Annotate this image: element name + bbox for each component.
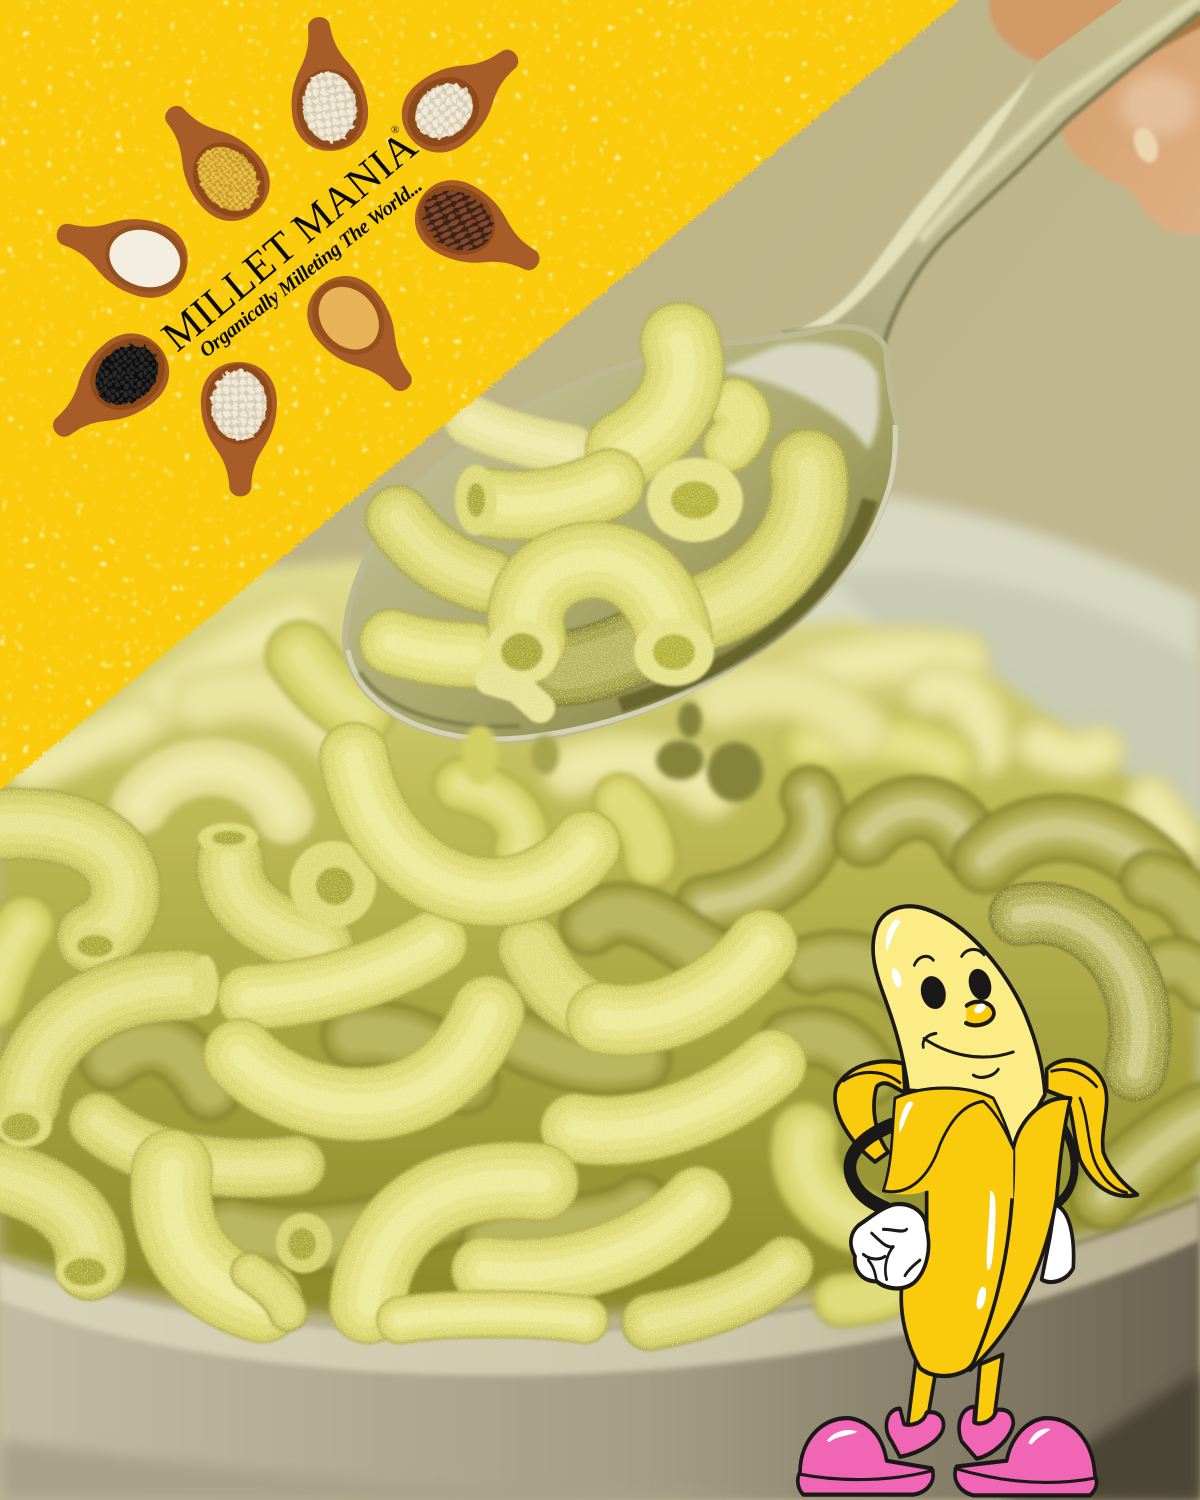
registered mark: ® (391, 124, 399, 136)
tagline: Organically Milleting The World... (196, 175, 427, 362)
banana body (901, 1144, 1014, 1376)
spoon bowl (345, 327, 897, 741)
left glove (851, 1204, 929, 1288)
scoop: pearl millet upper right (387, 24, 539, 168)
eyebrows (914, 949, 984, 965)
mid-distance macaroni (0, 655, 1200, 1300)
right back peel (1047, 1060, 1137, 1196)
right arm (1057, 1121, 1075, 1204)
scoop: white powder left (46, 195, 197, 307)
hand holding the spoon (989, 0, 1200, 235)
finger pad (1120, 73, 1196, 137)
left front peel (883, 1088, 1013, 1198)
right glove (1042, 1204, 1074, 1282)
pasta on the spoon (392, 342, 810, 708)
body highlights (987, 1191, 996, 1270)
right sock (959, 1407, 1013, 1459)
upper finger (989, 0, 1135, 62)
foreground macaroni (0, 823, 1140, 1322)
macaroni tube openings (0, 823, 258, 1293)
banana mascot (798, 906, 1137, 1495)
scoop: yellow millet upper left (140, 84, 285, 236)
spoon (345, 0, 1200, 741)
right front peel (970, 1098, 1071, 1370)
shadowed palm behind handle (1110, 0, 1200, 75)
spoon handle (780, 0, 1200, 400)
banana head (873, 906, 1045, 1152)
scoop: pearl millet bottom (200, 361, 279, 497)
handle highlights (785, 70, 1035, 330)
head highlights (886, 920, 901, 952)
eyes (916, 965, 996, 1014)
falling dark crumbs (462, 702, 763, 802)
fingernail (1130, 124, 1162, 166)
scoop: golden flour lower right (292, 261, 437, 413)
scoop: red rice right (402, 167, 556, 298)
blurred background macaroni (30, 620, 1180, 840)
falling pasta crumb (490, 680, 540, 708)
left back peel (835, 1061, 905, 1162)
scoop: pearl millet top (280, 12, 373, 156)
right shoe (955, 1418, 1097, 1495)
left arm (850, 1125, 904, 1218)
falling macaroni piece (354, 757, 586, 892)
left sock (886, 1409, 944, 1457)
pasta mass base (0, 560, 1200, 1316)
logo: Millet Mania (32, 12, 556, 497)
scoop: black seeds lower left (32, 318, 184, 462)
spoon inner shadow (620, 500, 870, 705)
left shoe (798, 1418, 933, 1495)
yellow diagonal panel (0, 0, 972, 798)
spoon bright reflection (720, 343, 879, 450)
serving bowl (0, 487, 1200, 1500)
legs (907, 1341, 937, 1428)
lower fingertip (1060, 25, 1200, 235)
brand name: MILLET MANIA (153, 122, 426, 361)
spoon lower rim (348, 425, 895, 739)
nose (966, 1002, 994, 1025)
smile (923, 1033, 1013, 1077)
